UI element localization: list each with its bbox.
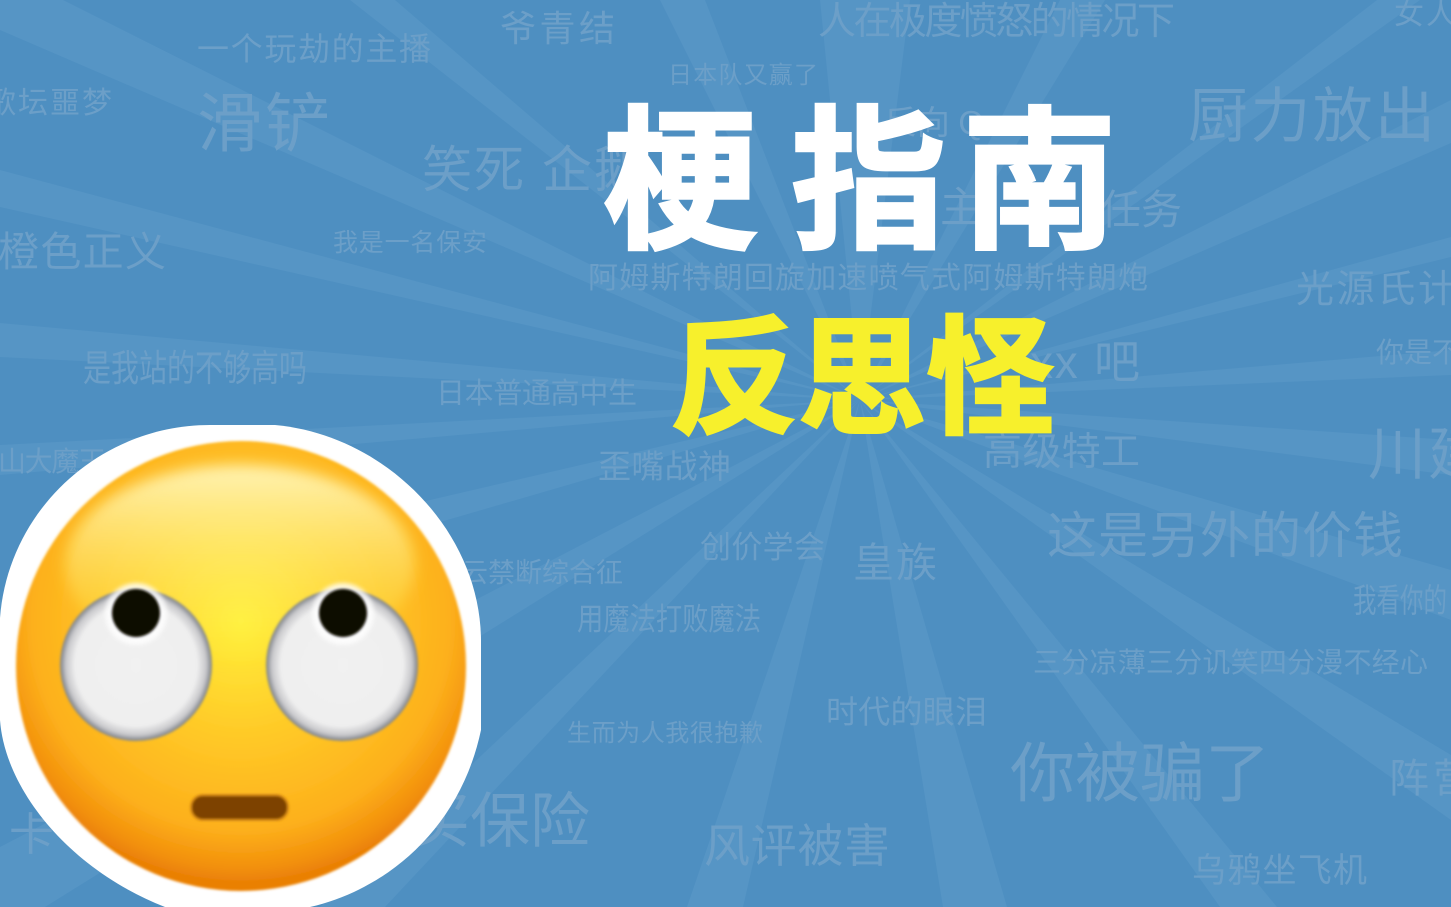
background meme phrases: 时代的眼泪 <box>826 694 987 730</box>
subtitle: 反思怪 <box>670 308 1054 451</box>
background meme phrases: 日本队又赢了 <box>668 62 818 89</box>
subtitle: 反思怪: 思 <box>798 308 926 451</box>
background meme phrases: 日本普通高中生 <box>436 377 637 410</box>
background meme phrases: 反向 Q <box>884 104 984 141</box>
background meme phrases: 山大魔王 <box>0 446 106 477</box>
background meme phrases: 生而为人我很抱歉 <box>567 720 763 747</box>
background meme phrases: 人在极度愤怒的情况下 <box>818 1 1175 43</box>
subtitle: 反思怪: 怪 <box>926 308 1054 451</box>
background meme phrases: 是我站的不够高吗 <box>83 348 307 389</box>
background meme phrases: 卡 <box>9 809 54 860</box>
background meme phrases: 笑死 企鹅 <box>422 142 644 198</box>
background meme phrases: 创价学会 <box>700 530 825 565</box>
background meme phrases: 皇族 <box>853 540 937 586</box>
background meme phrases: 云禁断综合征 <box>461 558 623 588</box>
background meme phrases: 厨力放出 <box>1188 83 1435 150</box>
background meme phrases: 滑铲 <box>197 87 330 160</box>
title: 梗指南 <box>603 96 1117 269</box>
background meme phrases: 一个玩劫的主播 <box>197 31 431 67</box>
background meme phrases: 主 <box>940 184 982 231</box>
background meme phrases: 用魔法打败魔法 <box>577 602 761 637</box>
background meme phrases: 高级特工 <box>983 431 1140 474</box>
background meme phrases: 我是一名保安 <box>333 229 487 257</box>
background meme phrases: 乌鸦坐飞机 <box>1192 852 1367 890</box>
subtitle: 反思怪: 反 <box>670 308 798 451</box>
background meme phrases: xx 吧 <box>1030 336 1140 388</box>
icon: eye-rolling emoji sticker <box>0 425 481 907</box>
background meme phrases: 你被骗了 <box>1010 737 1270 810</box>
background meme phrases: 阿姆斯特朗回旋加速喷气式阿姆斯特朗炮 <box>588 262 1148 295</box>
background meme phrases: 任务 <box>1100 187 1182 233</box>
background meme phrases: 三分凉薄三分讥笑四分漫不经心 <box>1033 647 1428 678</box>
sticker white border <box>0 425 481 907</box>
title: 梗指南: 指 <box>791 96 946 269</box>
face <box>16 441 466 891</box>
background meme phrases: 橙色正义 <box>0 229 166 275</box>
left eye <box>60 583 212 741</box>
forehead highlight <box>65 465 415 665</box>
title: 梗指南: 梗 <box>603 96 758 269</box>
mouth <box>191 795 288 820</box>
title: 梗指南: 南 <box>962 96 1117 269</box>
background meme phrases: 歪嘴战神 <box>598 448 731 485</box>
right eye <box>266 583 418 741</box>
background meme phrases: 风评被害 <box>704 820 890 872</box>
background meme phrases: 这是另外的价钱 <box>1047 508 1403 564</box>
background meme phrases: 爷青结 <box>500 8 615 49</box>
background meme phrases: 买保险 <box>410 788 590 855</box>
